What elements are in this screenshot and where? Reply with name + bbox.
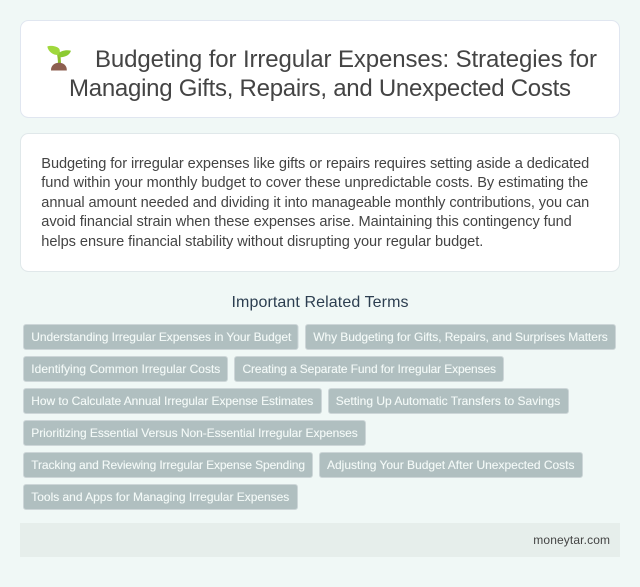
tag: Identifying Common Irregular Costs: [31, 362, 220, 376]
text block: summary: Budgeting for irregular expenses like gifts or repairs requires setting aside a dedicated: [41, 156, 589, 172]
footer: source: moneytar.com: [533, 533, 610, 547]
tag: [24, 324, 298, 350]
tag: Adjusting Your Budget After Unexpected Costs: [327, 458, 574, 472]
tag: [24, 484, 298, 510]
panel: intro text: [20, 134, 620, 272]
tag: [24, 452, 312, 478]
icon: sprout: [47, 46, 71, 70]
tag: Prioritizing Essential Versus Non-Essential Irregular Expenses: [31, 426, 358, 440]
text block: summary: avoid financial strain when these expenses arise. Maintaining this contingency fund: [41, 214, 572, 230]
title: [69, 46, 597, 102]
tag: [24, 356, 228, 382]
tag: [328, 388, 568, 414]
tag: [24, 388, 322, 414]
tag: Tools and Apps for Managing Irregular Expenses: [31, 490, 289, 504]
tag: Creating a Separate Fund for Irregular Expenses: [242, 362, 496, 376]
footer: [20, 523, 620, 557]
tag: Understanding Irregular Expenses in Your Budget: [31, 330, 292, 344]
heading: related terms: Important Related Terms: [232, 294, 408, 311]
panel: header: [20, 20, 620, 118]
tag: [24, 420, 366, 446]
text block: summary: [41, 156, 589, 250]
tag: How to Calculate Annual Irregular Expense Estimates: [31, 394, 313, 408]
tag: Why Budgeting for Gifts, Repairs, and Surprises Matters: [313, 330, 608, 344]
title: Managing Gifts, Repairs, and Unexpected Costs: [69, 75, 571, 102]
tag: [320, 452, 582, 478]
tag: [306, 324, 616, 350]
text block: summary: fund within your monthly budget to cover these unpredictable costs. By estimating the: [41, 175, 588, 191]
text block: summary: annual amount needed and dividing it into manageable monthly contributions, you can: [41, 195, 589, 211]
text block: summary: helps ensure financial stability without disrupting your regular budget.: [41, 234, 483, 250]
title: Budgeting for Irregular Expenses: Strategies for: [95, 46, 597, 73]
tag list: related terms: [24, 324, 616, 510]
tag: [234, 356, 504, 382]
tag: Tracking and Reviewing Irregular Expense Spending: [31, 458, 305, 472]
tag: Setting Up Automatic Transfers to Savings: [336, 394, 560, 408]
